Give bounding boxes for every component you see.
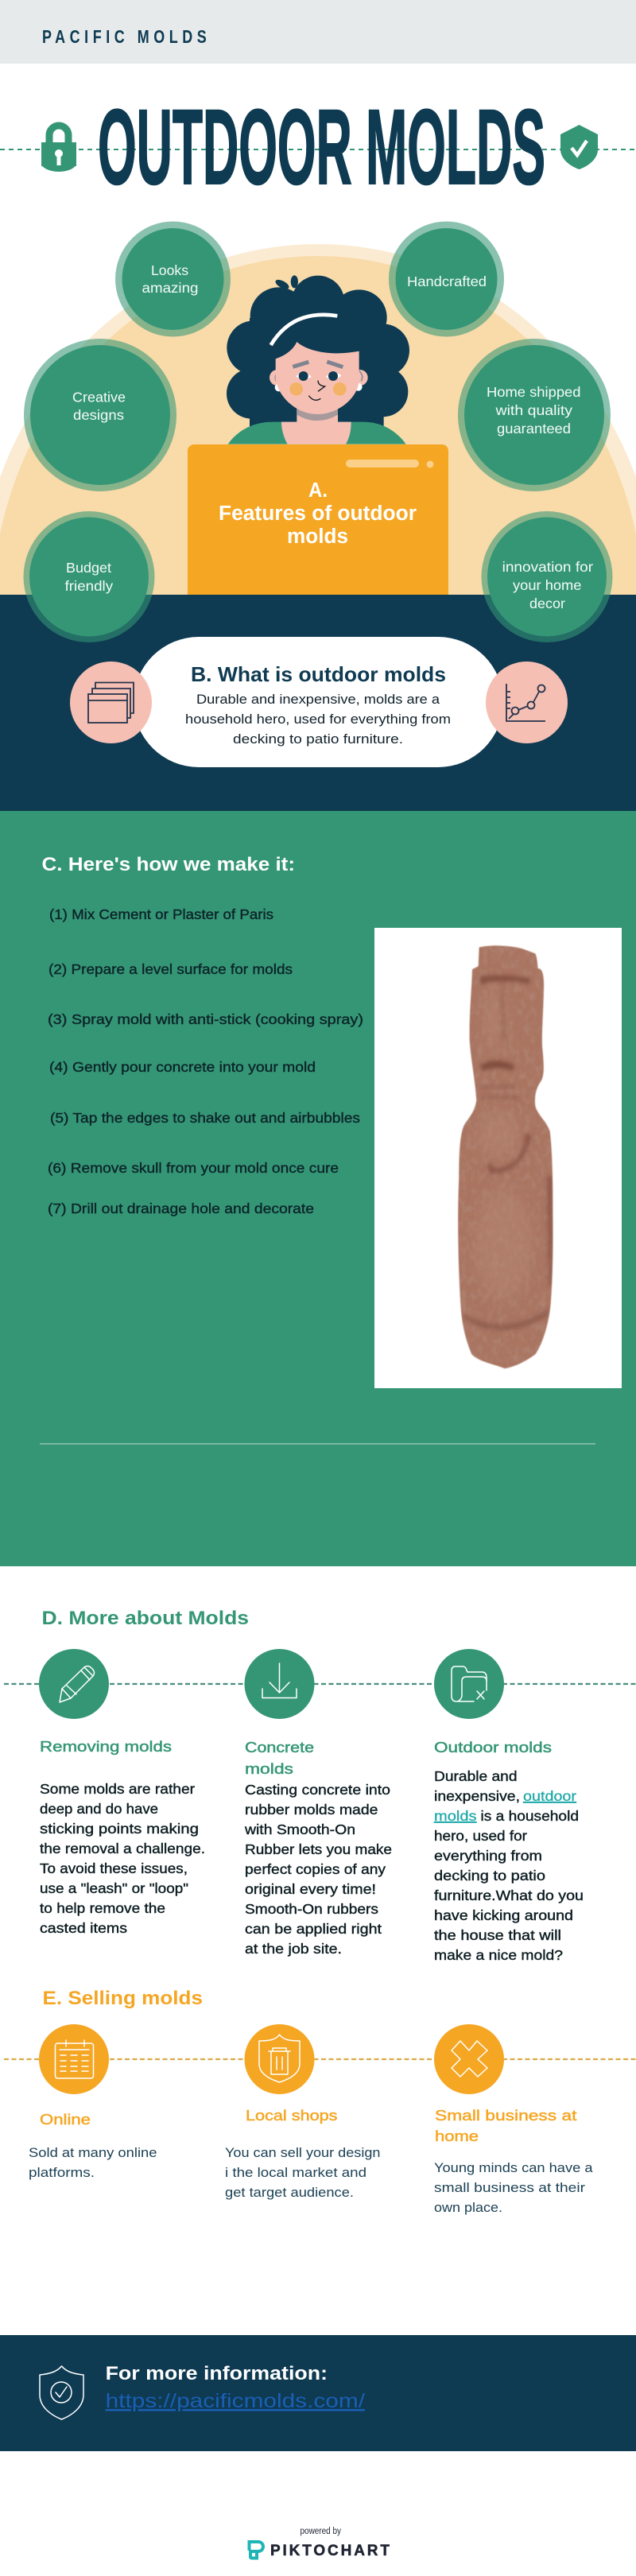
feature bubble: innovation: innovation for — [502, 559, 593, 575]
column: concrete molds: at the job site. — [245, 1941, 342, 1957]
neck and chest — [228, 405, 406, 444]
feature bubble: innovation — [482, 511, 612, 642]
column: concrete molds: original every time! — [245, 1881, 376, 1897]
column: outdoor molds: make a nice mold? — [434, 1947, 563, 1963]
feature bubble: creative designs: designs — [73, 407, 124, 423]
steps list: (1) Mix Cement or Plaster of Paris — [49, 906, 273, 922]
header bar — [0, 0, 636, 64]
heading A — [219, 479, 417, 548]
steps list: (7) Drill out drainage hole and decorate — [48, 1201, 314, 1216]
icon: stacked windows — [70, 661, 152, 743]
heading A: molds — [287, 526, 348, 548]
column: outdoor molds: Durable and — [434, 1768, 517, 1784]
column: outdoor molds: molds — [434, 1808, 477, 1824]
feature bubble: home shipped: with quality — [494, 402, 572, 418]
steps list: (3) Spray mold with anti-stick (cooking spray) — [48, 1011, 363, 1027]
column: removing molds: To avoid these issues, — [40, 1860, 188, 1876]
column: removing molds: deep and do have — [40, 1801, 158, 1817]
column: small business at home — [434, 2107, 593, 2215]
section D timeline — [4, 1649, 636, 1719]
column: concrete molds: molds — [245, 1760, 293, 1777]
feature bubble: looks amazing: amazing — [142, 280, 199, 296]
feature bubble: handcrafted — [389, 221, 504, 337]
icon: shield check — [560, 125, 598, 169]
section E timeline — [4, 2024, 636, 2094]
column: online — [29, 2111, 157, 2180]
column: local shops: i the local market and — [225, 2165, 366, 2180]
icon: shield check outline — [40, 2366, 83, 2419]
section D heading: D. More about Molds — [41, 1608, 249, 1629]
feature bubble: budget friendly — [24, 511, 154, 642]
column: small business at home: home — [435, 2128, 479, 2144]
column: small business at home: own place. — [434, 2200, 502, 2215]
column: outdoor molds: hero, used for — [434, 1828, 527, 1844]
column: local shops — [225, 2107, 380, 2200]
column: local shops: get target audience. — [225, 2185, 354, 2200]
column: removing molds: Removing molds — [40, 1738, 172, 1755]
column: concrete molds: rubber molds made — [245, 1802, 378, 1818]
column: removing molds: sticking points making — [40, 1821, 199, 1837]
feature bubble: home shipped: guaranteed — [497, 421, 571, 436]
column: outdoor molds: Outdoor molds — [434, 1739, 552, 1755]
feature bubble: home shipped: Home shipped — [487, 384, 580, 400]
icon: padlock — [41, 126, 76, 172]
feature bubble: handcrafted: Handcrafted — [407, 274, 487, 289]
icon: pencil — [39, 1649, 109, 1719]
heading A: Features of outdoor — [219, 502, 417, 525]
panel: footer call to action — [0, 2335, 636, 2451]
column: concrete molds: Rubber lets you make — [245, 1841, 392, 1857]
column: concrete molds: perfect copies of any — [245, 1861, 386, 1877]
title row — [0, 88, 636, 207]
column: outdoor molds: decking to patio — [434, 1868, 545, 1884]
column: small business at home: Small business at — [435, 2107, 577, 2124]
feature bubble: budget friendly: friendly — [65, 578, 113, 594]
steps list — [48, 906, 363, 1216]
column: removing molds — [40, 1738, 205, 1936]
ears and earrings — [270, 370, 368, 391]
column: online: Online — [40, 2111, 91, 2128]
column: local shops: You can sell your design — [225, 2145, 380, 2160]
column: removing molds: casted items — [40, 1920, 127, 1936]
column: removing molds: Some molds are rather — [40, 1781, 195, 1797]
logo wordmark: PIKTOCHART — [270, 2543, 390, 2559]
photo: stone moai mold — [374, 928, 622, 1388]
column: local shops: Local shops — [246, 2107, 337, 2124]
feature bubble: innovation: your home — [513, 577, 582, 593]
icon: download — [245, 1649, 315, 1719]
column: concrete molds: can be applied right — [245, 1921, 382, 1937]
column: outdoor molds: have kicking around — [434, 1907, 573, 1923]
hero arch background — [0, 244, 636, 595]
section E heading: E. Selling molds — [43, 1988, 203, 2009]
steps list: (5) Tap the edges to shake out and airbubbles — [50, 1110, 360, 1126]
headband — [271, 315, 337, 345]
facial features — [289, 362, 347, 400]
steps list: (6) Remove skull from your mold once cure — [48, 1160, 339, 1176]
heading C: C. Here's how we make it: — [41, 854, 295, 875]
icon: shield with trash can — [245, 2024, 315, 2094]
icon: line chart — [486, 661, 568, 743]
feature bubble: innovation: decor — [529, 596, 565, 611]
fringe — [270, 318, 367, 360]
description: decking to patio furniture. — [233, 731, 403, 747]
column: outdoor molds: is a household — [480, 1808, 579, 1824]
brand name: PACIFIC MOLDS — [42, 27, 207, 48]
logo mark — [250, 2542, 263, 2559]
description: Durable and inexpensive, molds are a — [196, 692, 440, 707]
illustration: woman with curly hair — [227, 275, 409, 444]
icon: x mark — [434, 2024, 504, 2094]
panel: section C how we make it — [0, 811, 636, 1566]
description — [185, 692, 451, 747]
column: online: Sold at many online — [29, 2145, 157, 2160]
feature bubble: creative designs: Creative — [72, 390, 126, 405]
feature bubble: budget friendly: Budget — [66, 560, 111, 576]
more information text: For more information: — [106, 2363, 328, 2384]
column: outdoor molds: outdoor — [523, 1788, 576, 1804]
column: concrete molds: Casting concrete into — [245, 1782, 390, 1798]
column: removing molds: the removal a challenge. — [40, 1841, 205, 1856]
panel: what is outdoor molds pill — [134, 637, 503, 767]
face — [276, 342, 359, 414]
heading A: A. — [308, 479, 328, 502]
panel: section A heading card — [188, 444, 448, 595]
column: outdoor molds: the house that will — [434, 1927, 561, 1943]
website link: https://pacificmolds.com/ — [106, 2390, 365, 2412]
steps list: (4) Gently pour concrete into your mold — [49, 1059, 316, 1075]
powered by piktochart logo — [250, 2527, 390, 2559]
heading B: B. What is outdoor molds — [191, 662, 446, 686]
column: outdoor molds — [434, 1739, 584, 1963]
feature bubble: home shipped — [458, 339, 611, 491]
column: outdoor molds: everything from — [434, 1848, 542, 1864]
column: outdoor molds: inexpensive, — [434, 1788, 520, 1804]
column: concrete molds — [244, 1739, 392, 1957]
icon: calendar — [39, 2024, 109, 2094]
column: small business at home: small business at their — [434, 2180, 585, 2195]
feature bubble: looks amazing — [115, 221, 231, 337]
column: concrete molds: with Smooth-On — [244, 1821, 355, 1837]
feature bubble: creative designs — [24, 339, 176, 491]
steps list: (2) Prepare a level surface for molds — [48, 961, 293, 977]
column: online: platforms. — [29, 2165, 95, 2180]
icon: folder with x — [434, 1649, 504, 1719]
column: concrete molds: Smooth-On rubbers — [245, 1901, 378, 1917]
column: concrete molds: Concrete — [245, 1739, 314, 1755]
column: small business at home: Young minds can have a — [434, 2160, 593, 2175]
column: outdoor molds: furniture.What do you — [434, 1887, 584, 1903]
feature bubble: looks amazing: Looks — [151, 262, 188, 278]
panel: section B background — [0, 595, 636, 811]
hair — [227, 275, 409, 427]
powered by piktochart logo: powered by — [301, 2527, 341, 2536]
description: household hero, used for everything from — [185, 712, 451, 727]
column: removing molds: use a "leash" or "loop" — [40, 1880, 188, 1896]
column: removing molds: to help remove the — [40, 1900, 165, 1916]
